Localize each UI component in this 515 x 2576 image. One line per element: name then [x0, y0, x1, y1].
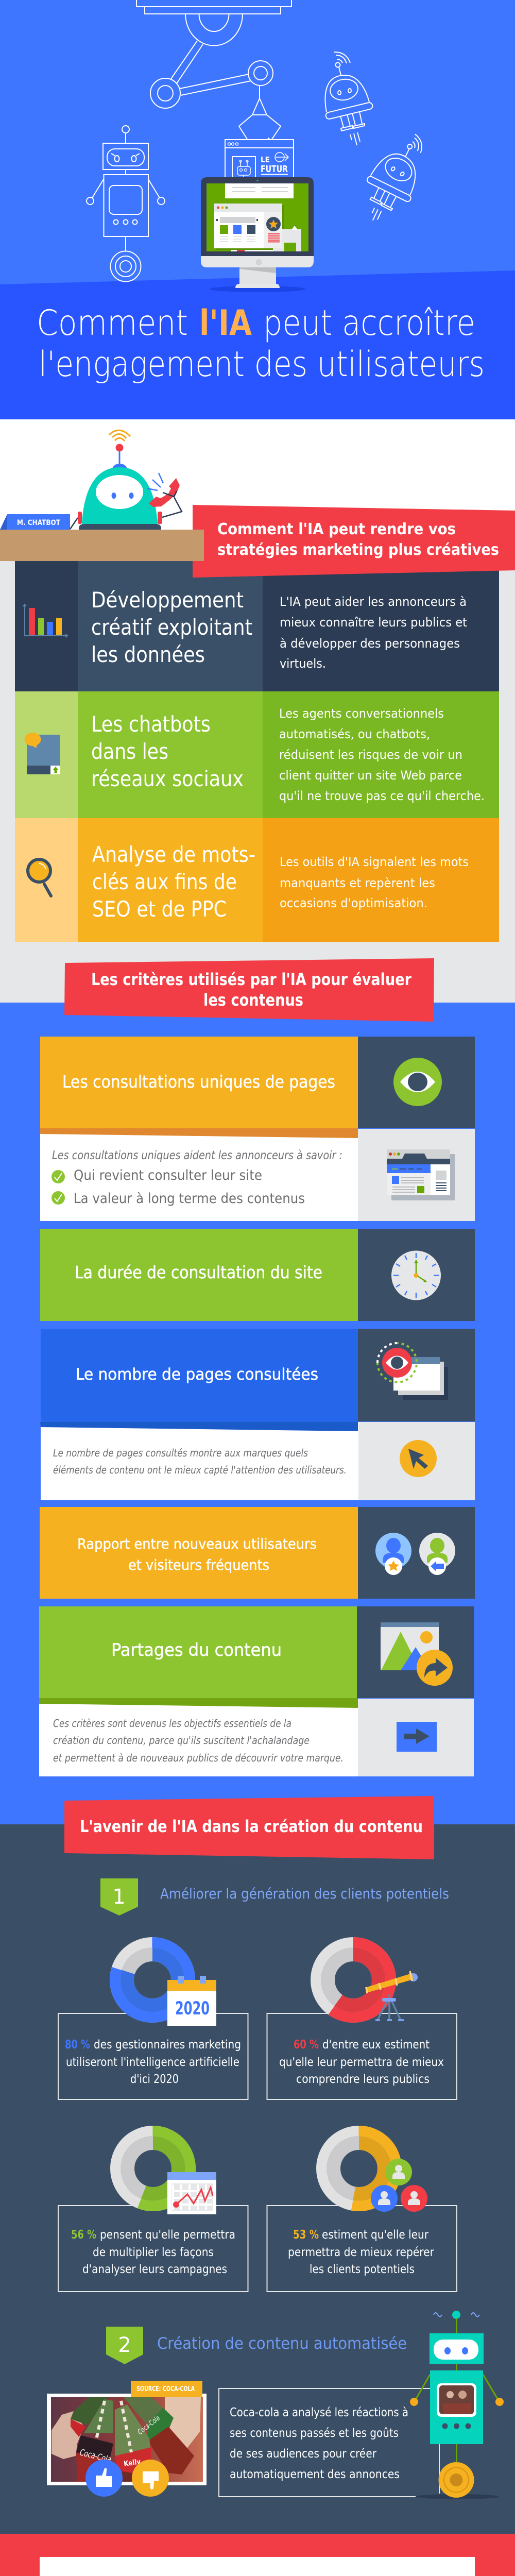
table row: data-driven creative development: L'IA peut aider les annonceurs à	[280, 595, 467, 609]
card: new vs returning visitors: Rapport entre nouveaux utilisateurs	[77, 1535, 317, 1552]
icon: line art standing robot	[87, 126, 165, 281]
step 2 heading	[106, 2327, 407, 2364]
table row: keyword analysis: occasions d'optimisation.	[280, 896, 427, 910]
table row: data-driven creative development: virtuels.	[280, 656, 326, 671]
card: time on site	[40, 1229, 475, 1321]
icon: teal robot	[410, 2311, 504, 2499]
card: pages viewed: Le nombre de pages consultées	[76, 1365, 318, 1384]
table row: chatbots on social networks: Les agents conversationnels	[279, 706, 444, 721]
desk	[0, 530, 204, 561]
icon: magnifying glass	[28, 859, 51, 896]
icon: desktop monitor	[201, 177, 314, 292]
heading banner: criteria	[64, 958, 434, 1022]
table row: keyword analysis: clés aux fins de	[92, 869, 237, 894]
card: content shares	[39, 1606, 474, 1776]
table row: data-driven creative development: Développement	[91, 587, 244, 613]
heading banner: marketing strategies: Comment l'IA peut rendre vos	[217, 520, 456, 538]
panel: call to action	[0, 2534, 515, 2576]
text box: coca-cola: Coca-cola a analysé les réactions à	[230, 2406, 408, 2419]
table row: keyword analysis: Les outils d'IA signalent les mots	[280, 855, 469, 869]
card: pages viewed: Le nombre de pages consultés montre aux marques quels	[53, 1447, 308, 1459]
stat: 80 %: des gestionnaires marketing	[94, 2038, 241, 2052]
icon: potential clients	[371, 2159, 427, 2212]
icon: analytics calendar	[167, 2172, 216, 2214]
heading banner: criteria: les contenus	[203, 990, 303, 1010]
table row: data-driven creative development: à développer des personnages	[280, 636, 460, 651]
stat: 56 %: d'analyser leurs campagnes	[82, 2263, 227, 2276]
stat: 60 %: comprendre leurs publics	[296, 2073, 430, 2086]
card: new vs returning visitors	[40, 1507, 475, 1599]
icon: telescope	[365, 1971, 418, 2020]
stat: 60 %: d'entre eux estiment	[322, 2038, 430, 2052]
table row: chatbots on social networks: automatisés, ou chatbots,	[279, 727, 430, 741]
source tag	[131, 2381, 202, 2397]
card: pages viewed: éléments de contenu ont le mieux capté l'attention des utilisateurs.	[53, 1464, 347, 1476]
stat: 56 %	[58, 2131, 248, 2292]
icon: bar chart	[23, 604, 67, 637]
stat: 80 %: utiliseront l'intelligence artificielle	[66, 2056, 239, 2069]
panel: marketing strategies	[0, 419, 515, 1003]
table row: chatbots on social networks: réseaux sociaux	[91, 766, 244, 791]
step 1 heading	[100, 1878, 449, 1916]
name plate: M. Chatbot	[0, 514, 70, 530]
source tag: SOURCE: COCA-COLA	[136, 2385, 195, 2393]
heading banner: criteria: Les critères utilisés par l'IA pour évaluer	[91, 970, 411, 989]
photo: coca-cola bottles: Kelly	[123, 2458, 141, 2468]
stat: 53 %: permettra de mieux repérer	[288, 2246, 434, 2259]
stat: 53 %: les clients potentiels	[310, 2263, 415, 2276]
icon: line art browser "le futur": LE	[261, 155, 270, 164]
icon: clock	[391, 1251, 441, 1300]
icon: arrow tile	[397, 1722, 437, 1752]
table row: data-driven creative development: mieux connaître leurs publics et	[280, 615, 467, 630]
icon: line art flying robot 1	[325, 52, 373, 145]
card: unique page views: Les consultations uniques de pages	[62, 1072, 335, 1092]
stat: 80 %: d'ici 2020	[130, 2073, 179, 2086]
list item: returning visitors: Qui revient consulter leur site	[74, 1167, 262, 1183]
title	[37, 303, 485, 385]
icon: share image	[381, 1622, 453, 1686]
title: peut accroître	[263, 303, 475, 344]
table row: keyword analysis	[15, 818, 499, 942]
stat: 53 %	[267, 2131, 457, 2292]
list item: long-term content value: La valeur à long terme des contenus	[74, 1191, 305, 1207]
stat: 56 %: pensent qu'elle permettra	[100, 2228, 235, 2242]
icon: eye	[393, 1058, 442, 1106]
CTA box	[40, 2557, 475, 2576]
table row: chatbots on social networks: client quitter un site Web parce	[279, 768, 462, 783]
name plate: M. Chatbot: M. CHATBOT	[17, 519, 60, 527]
panel: hero	[0, 0, 515, 420]
illustration: chatbot at desk	[0, 430, 204, 561]
donut chart: 80 %	[115, 1942, 190, 2018]
panel: future of AI in content creation	[0, 1796, 515, 2534]
table row: keyword analysis: Analyse de mots-	[92, 842, 255, 867]
table row: chatbots on social networks	[15, 691, 499, 818]
photo: coca-cola bottles: Coca-Cola	[79, 2447, 112, 2465]
icon: line art browser "le futur"	[225, 140, 294, 178]
stat: 60 %: qu'elle leur permettra de mieux	[279, 2056, 444, 2069]
stat: 56 %: de multiplier les façons	[93, 2246, 214, 2259]
text box: coca-cola: de ses audiences pour créer	[230, 2447, 376, 2461]
heading banner: future	[64, 1796, 434, 1859]
text box: coca-cola: automatiquement des annonces	[230, 2468, 400, 2481]
card: unique page views	[40, 1037, 475, 1221]
donut chart: 60 %	[316, 1942, 391, 2018]
icon: thumbs up	[85, 2460, 123, 2497]
text box: coca-cola	[219, 2388, 439, 2497]
step 2 heading: 2	[118, 2333, 131, 2357]
card: content shares: et permettent à de nouveaux publics de découvrir votre marque.	[53, 1752, 344, 1764]
step 2 heading: Création de contenu automatisée	[157, 2334, 407, 2353]
text box: coca-cola: ses contenus passés et les goûts	[230, 2427, 399, 2440]
icon: cursor	[400, 1440, 437, 1477]
card: pages viewed	[40, 1329, 475, 1500]
table row: keyword analysis: SEO et de PPC	[92, 896, 227, 922]
stat: 53 %: estiment qu'elle leur	[322, 2228, 428, 2242]
icon: 2020 calendar	[167, 1976, 216, 2026]
table row: data-driven creative development: les données	[91, 642, 205, 667]
donut chart: 53 %	[321, 2131, 397, 2206]
table row: chatbots on social networks: qu'il ne trouve pas ce qu'il cherche.	[279, 789, 485, 803]
icon: browser window	[387, 1149, 455, 1200]
stat: 60 %	[267, 1942, 457, 2099]
icon: 2020 calendar: 2020	[175, 1998, 210, 2019]
table row: chatbots on social networks: Les chatbots	[91, 711, 211, 737]
icon: chatbot robot with phone	[70, 430, 182, 530]
stat: 80 %: 80 %	[65, 2038, 90, 2052]
card: content shares: Ces critères sont devenus les objectifs essentiels de la	[53, 1717, 291, 1730]
stat: 80 %	[58, 1942, 248, 2099]
photo: coca-cola bottles	[47, 2381, 207, 2497]
card: time on site: La durée de consultation du site	[75, 1262, 322, 1282]
card: content shares: Partages du contenu	[111, 1640, 282, 1660]
icon: thumbs down	[132, 2460, 169, 2497]
step 1 heading: Améliorer la génération des clients potentiels	[160, 1885, 449, 1902]
icon: line art browser "le futur": FUTUR	[261, 164, 288, 175]
icon: watched browser pages	[377, 1343, 448, 1400]
icon: line art flying robot 2	[348, 128, 445, 231]
title: l'IA	[199, 303, 252, 344]
stat: 60 %: 60 %	[294, 2038, 319, 2052]
card: new vs returning visitors: et visiteurs fréquents	[128, 1556, 269, 1573]
icon: social post with speech bubble	[25, 733, 60, 774]
card: content shares: création du contenu, parce qu'ils suscitent l'achalandage	[53, 1734, 310, 1747]
table row: data-driven creative development	[15, 561, 499, 691]
stat: 56 %: 56 %	[71, 2228, 96, 2242]
icon: robot arm line art	[136, 0, 291, 144]
table row: data-driven creative development: créatif exploitant	[91, 615, 252, 640]
card: unique page views: Les consultations uniques aident les annonceurs à savoir :	[52, 1149, 342, 1162]
heading banner: marketing strategies	[193, 505, 515, 578]
donut chart: 56 %	[115, 2131, 191, 2206]
step 1 heading: 1	[112, 1885, 126, 1909]
icon: new user	[375, 1533, 411, 1575]
table row: keyword analysis: manquants et repèrent les	[280, 876, 435, 890]
table row: chatbots on social networks: dans les	[91, 739, 168, 764]
title: Comment	[37, 303, 188, 344]
photo: coca-cola bottles: Coca-Cola	[136, 2414, 162, 2436]
panel: evaluation criteria	[0, 958, 515, 1824]
table row: chatbots on social networks: réduisent les risques de voir un	[279, 748, 462, 762]
heading banner: future: L'avenir de l'IA dans la création du contenu	[80, 1817, 423, 1836]
icon: returning user	[419, 1533, 455, 1575]
stat: 53 %: 53 %	[293, 2228, 319, 2242]
